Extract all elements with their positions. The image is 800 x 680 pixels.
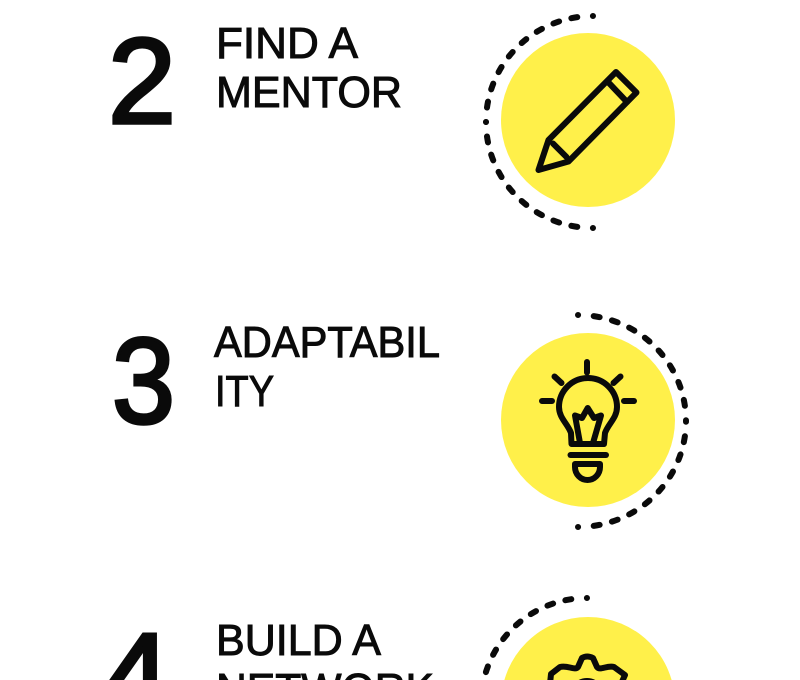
- dashed arc: [578, 315, 686, 527]
- heading: build a network: [216, 616, 434, 680]
- heading: adaptability: ITY: [215, 367, 274, 416]
- number 2: 2: [108, 13, 176, 149]
- icon: gear: [550, 656, 625, 680]
- yellow circle: [501, 617, 675, 680]
- heading: find a mentor: [216, 19, 402, 117]
- yellow circle: [501, 33, 675, 207]
- icon: pencil: [538, 72, 636, 170]
- yellow circle: [501, 333, 675, 507]
- dashed arc: [481, 598, 587, 680]
- heading: find a mentor: MENTOR: [216, 68, 402, 117]
- step 3: adaptability: [112, 313, 686, 527]
- icon: light bulb: [542, 362, 634, 480]
- heading: find a mentor: FIND A: [216, 19, 359, 68]
- dashed arc: [486, 16, 593, 228]
- step 4: build a network: [101, 598, 675, 680]
- heading: build a network: BUILD A: [216, 616, 382, 665]
- number 3: 3: [112, 313, 175, 449]
- heading: adaptability: [214, 318, 440, 416]
- step 2: find a mentor: [108, 13, 675, 228]
- heading: adaptability: ADAPTABIL: [214, 318, 440, 367]
